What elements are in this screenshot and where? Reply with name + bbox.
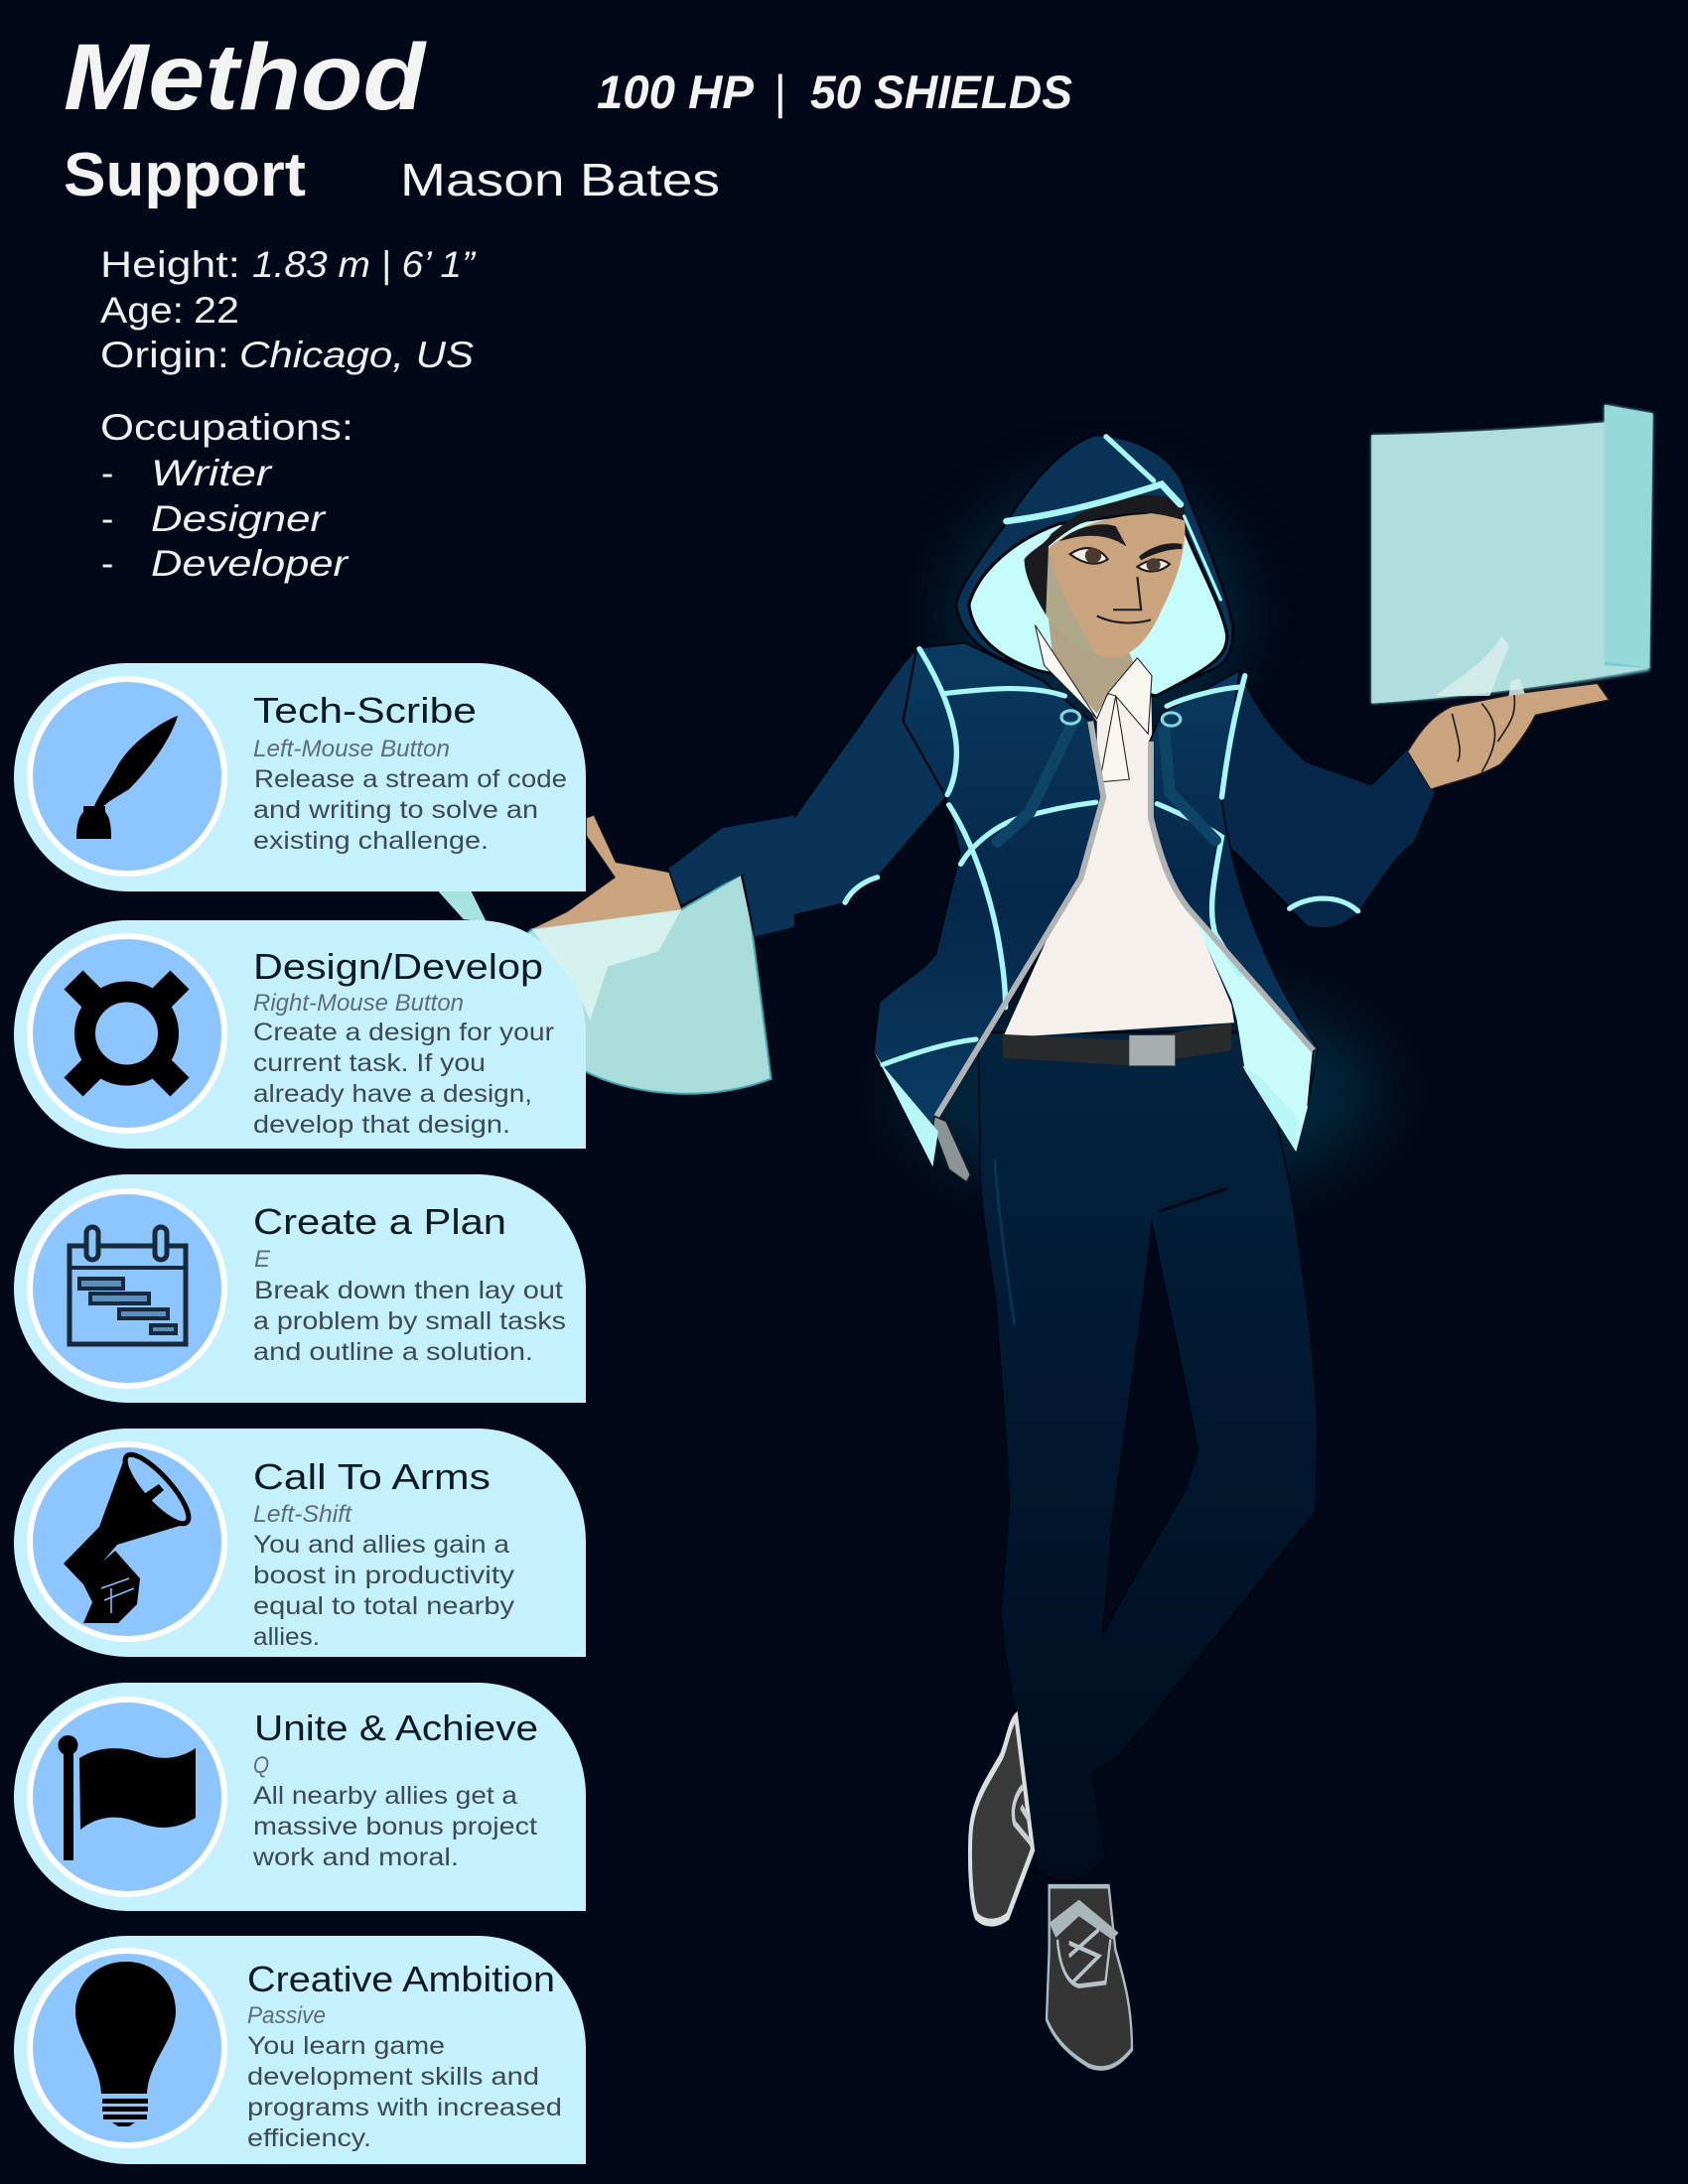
occupations list [100,407,353,584]
card: Create a Plan [14,1174,586,1403]
hood lining [969,508,1227,696]
glowing jacket trim [845,437,1358,1064]
skill name: Unite & Achieve [254,1707,538,1748]
skill description: Break down then lay out [254,1277,563,1304]
role: Support: Support [64,141,306,209]
character biography: Origin: [100,335,229,375]
key binding: Passive [247,2002,326,2029]
occupations list: Designer [151,498,327,539]
character glow [904,481,1380,1196]
skill description: programs with increased [247,2094,562,2121]
health and shields: | [774,66,785,118]
skill name: Tech-Scribe [253,690,477,731]
skill description: Create a design for your [253,1019,554,1046]
skill description: All nearby allies get a [253,1782,517,1810]
skill description: develop that design. [253,1111,510,1139]
character biography [100,244,477,375]
occupations list: Writer [151,453,273,493]
title: Method: Method [64,25,427,130]
eyes [1070,548,1170,572]
character name: Mason Bates [400,154,720,205]
skill description [253,1531,515,1651]
character pants [978,1032,1318,1881]
skill description: development skills and [247,2063,539,2091]
zipper [936,722,1314,1116]
character shoes [970,1716,1132,2069]
character biography: Height: [100,244,240,285]
key binding: Left-Shift [253,1501,352,1528]
shirt collar [1035,625,1152,782]
icon: light bulb [75,1962,176,2126]
occupations list: - [101,453,113,493]
skill description: allies. [253,1623,320,1651]
nose and smile [1097,577,1151,623]
character biography: 22 [194,290,239,331]
skill description: efficiency. [247,2124,371,2152]
icon: crossed ring [73,980,180,1087]
eyebrows [1059,524,1182,560]
skill name: Creative Ambition [247,1959,555,1999]
key binding: E [254,1246,271,1273]
card: Creative Ambition [14,1936,586,2164]
card: Call To Arms [14,1429,586,1657]
face shading [1046,549,1097,656]
health and shields [597,66,1072,118]
character torso, arms and head [742,435,1610,1182]
occupations list: Developer [151,543,350,584]
neck [1049,619,1137,714]
drawstring eyelets [1061,711,1181,726]
right hand [1407,683,1610,789]
health and shields: 100 HP [597,66,755,118]
front shoe [1047,1886,1132,2069]
skill description: You and allies gain a [253,1531,509,1559]
key binding: Left-Mouse Button [253,736,450,762]
card: Design/Develop [14,920,586,1149]
dark sleeve cuff [668,816,794,937]
skill description: a problem by small tasks [253,1307,566,1335]
icon: quill and inkpot [76,716,178,839]
skill description: You learn game [247,2032,445,2060]
character biography: Age: [100,290,184,331]
left bell sleeve hologram [438,873,772,1094]
jacket lining [1162,833,1314,1152]
card: Tech-Scribe [14,663,586,891]
skill description [253,1019,554,1139]
icon: gantt calendar [70,1227,186,1344]
skill description: already have a design, [253,1080,532,1108]
skill description [252,1782,537,1871]
right sleeve [1215,671,1436,928]
occupations list: - [101,543,113,584]
ribbed hems [874,1050,1297,1167]
skill description: work and moral. [252,1843,459,1871]
hood [956,435,1233,696]
skill name: Create a Plan [253,1201,506,1242]
jacket right panel [1150,671,1318,1106]
left hand reaching over the cards [532,816,794,1021]
skill description: and writing to solve an [253,796,538,824]
hologram panel [1371,405,1653,704]
icon: megaphone in fist [64,1446,198,1623]
skill description [247,2032,562,2152]
left sleeve [742,648,946,936]
header: title and stats [64,25,1072,209]
icon: flag [58,1735,196,1860]
character biography: Chicago, US [239,335,474,375]
skill name: Call To Arms [253,1456,491,1497]
drawstrings [997,727,1215,842]
faded fingers through hologram [532,909,681,1021]
skill description: and outline a solution. [253,1338,533,1366]
key binding: Right-Mouse Button [253,990,464,1017]
skill description: existing challenge. [253,827,489,855]
skill description [253,1277,566,1366]
belt [1003,1023,1231,1065]
face [1046,514,1186,658]
shirt [1003,635,1234,1037]
zipper pull [932,1116,970,1182]
health and shields: 50 SHIELDS [810,66,1072,118]
jacket left panel [874,642,1104,1167]
character biography: 1.83 m | 6’ 1” [252,244,477,285]
back shoe [970,1716,1033,1923]
card: Unite & Achieve [14,1683,586,1911]
hair [1025,495,1187,614]
occupations list: - [101,498,113,539]
occupations list: Occupations: [100,407,353,448]
skill description: massive bonus project [253,1813,537,1841]
belt buckle [1129,1035,1175,1065]
palm and fingers [532,816,681,929]
skill description: Release a stream of code [254,765,567,793]
skill name: Design/Develop [253,946,543,987]
skill cards [14,663,586,2164]
skill description: equal to total nearby [253,1592,515,1620]
right hand finger lines [1452,693,1514,772]
skill description: current task. If you [253,1049,486,1077]
skill description: boost in productivity [253,1562,515,1589]
key binding: Q [253,1752,269,1779]
skill description [253,765,567,855]
